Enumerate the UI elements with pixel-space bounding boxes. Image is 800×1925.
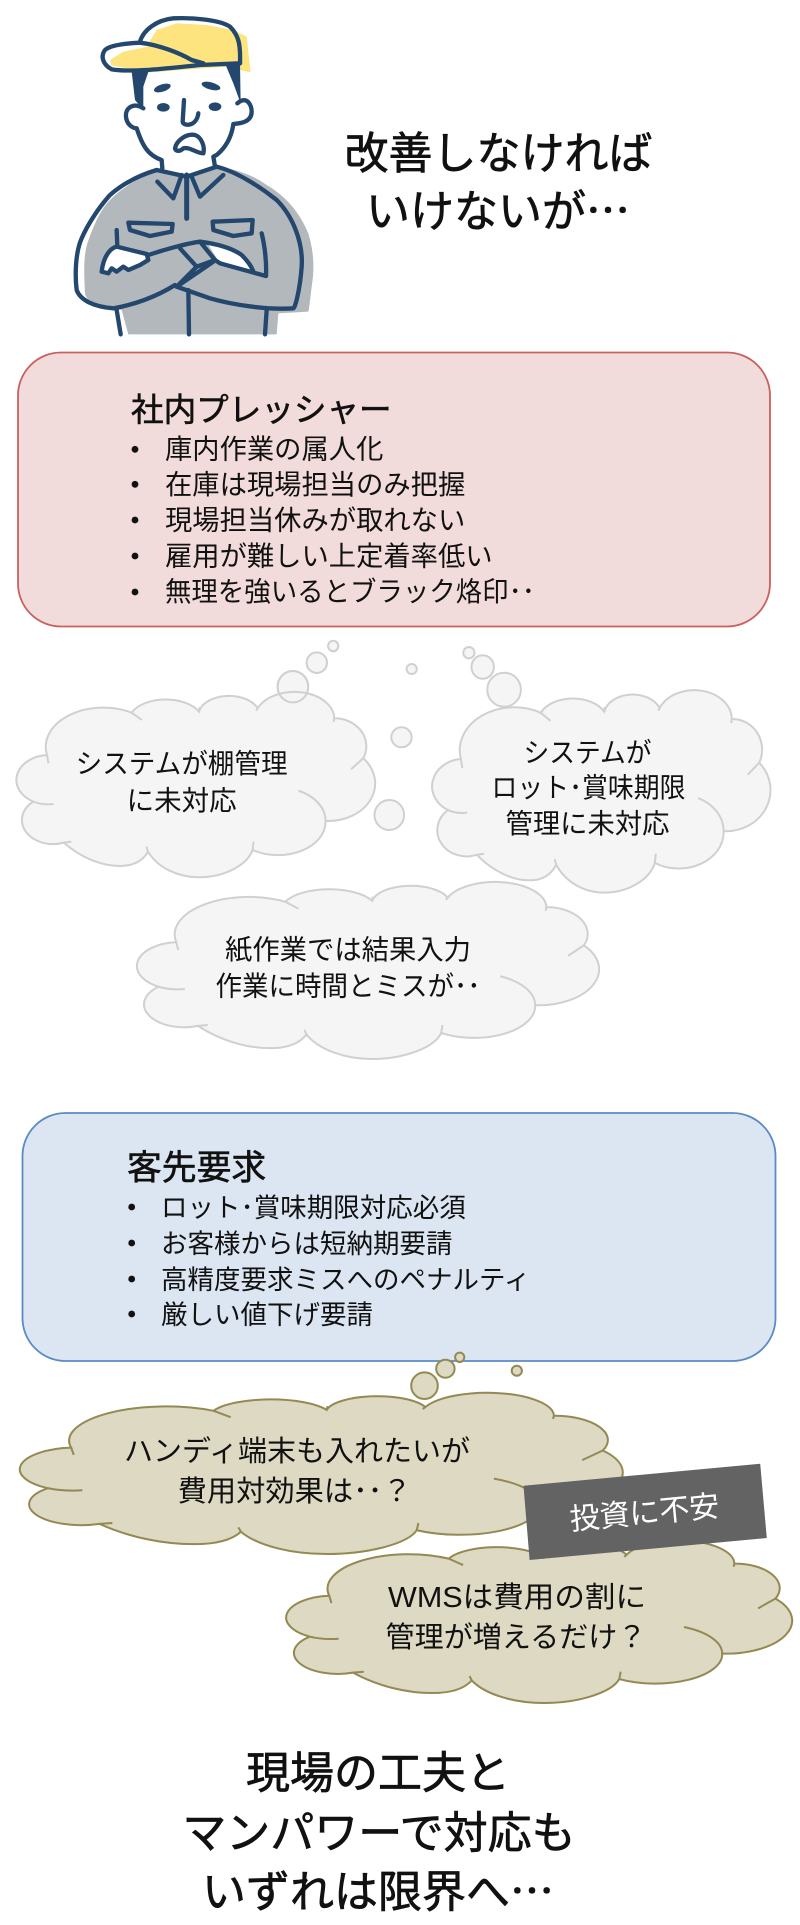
top heading: いけないが… xyxy=(366,176,630,240)
cloud: handheld terminal cost effectiveness: ハンディ端末も入れたいが xyxy=(124,1435,470,1468)
list: internal pressure items: 無理を強いるとブラック烙印･･ xyxy=(165,576,535,607)
cloud: handheld terminal cost effectiveness xyxy=(20,1393,623,1554)
callout: investment anxiety tag: 投資に不安 xyxy=(568,1490,721,1537)
cloud: paper work time and errors xyxy=(137,882,599,1059)
cloud: WMS cost concerns: 管理が増えるだけ？ xyxy=(386,1621,646,1654)
cloud: no lot and expiry management: システムが xyxy=(524,737,652,768)
list: customer demand items: お客様からは短納期要請 xyxy=(161,1229,452,1259)
cloud: no lot and expiry management: 管理に未対応 xyxy=(506,808,670,839)
top heading: 改善しなければ xyxy=(344,130,652,178)
panel: internal pressure xyxy=(18,352,770,626)
cloud: paper work time and errors: 作業に時間とミスが･･ xyxy=(216,970,480,1002)
cloud: no shelf management: システムが棚管理 xyxy=(76,748,288,779)
cloud: paper work time and errors: 紙作業では結果入力 xyxy=(225,934,471,965)
heading: customer demands: 客先要求 xyxy=(127,1148,266,1188)
cloud: handheld terminal cost effectiveness: 費用対効果は･･？ xyxy=(178,1475,412,1508)
cloud: WMS cost concerns: WMSは費用の割に xyxy=(388,1581,646,1614)
illustration: worried worker with crossed arms xyxy=(76,18,313,334)
list: customer demand items: ロット･賞味期限対応必須 xyxy=(161,1193,466,1223)
conclusion heading xyxy=(182,1749,576,1920)
list: internal pressure items: 在庫は現場担当のみ把握 xyxy=(165,469,465,500)
conclusion heading: マンパワーで対応も xyxy=(182,1809,576,1858)
heading: internal pressure: 社内プレッシャー xyxy=(131,391,392,428)
conclusion heading: 現場の工夫と xyxy=(246,1749,510,1798)
cloud: no lot and expiry management: ロット･賞味期限 xyxy=(492,772,686,803)
list: customer demand items: 高精度要求ミスへのペナルティ xyxy=(161,1265,530,1295)
list: customer demand items: 厳しい値下げ要請 xyxy=(161,1300,373,1330)
thought bubbles: grey clouds trail xyxy=(278,641,521,830)
list: internal pressure items: 庫内作業の属人化 xyxy=(165,434,383,464)
cloud: WMS cost concerns xyxy=(286,1540,792,1703)
cloud: no shelf management: に未対応 xyxy=(127,785,237,816)
panel: customer demands xyxy=(22,1113,776,1361)
conclusion heading: いずれは限界へ… xyxy=(202,1856,554,1920)
list: internal pressure items xyxy=(132,434,535,607)
cloud: no lot and expiry management xyxy=(432,690,770,893)
cloud: no shelf management xyxy=(16,671,375,877)
list: customer demand items xyxy=(128,1193,530,1330)
thought bubbles: khaki cloud trail xyxy=(411,1353,522,1399)
top heading xyxy=(344,130,652,240)
callout: investment anxiety tag xyxy=(524,1464,767,1560)
list: internal pressure items: 現場担当休みが取れない xyxy=(165,504,465,536)
list: internal pressure items: 雇用が難しい上定着率低い xyxy=(165,540,493,572)
